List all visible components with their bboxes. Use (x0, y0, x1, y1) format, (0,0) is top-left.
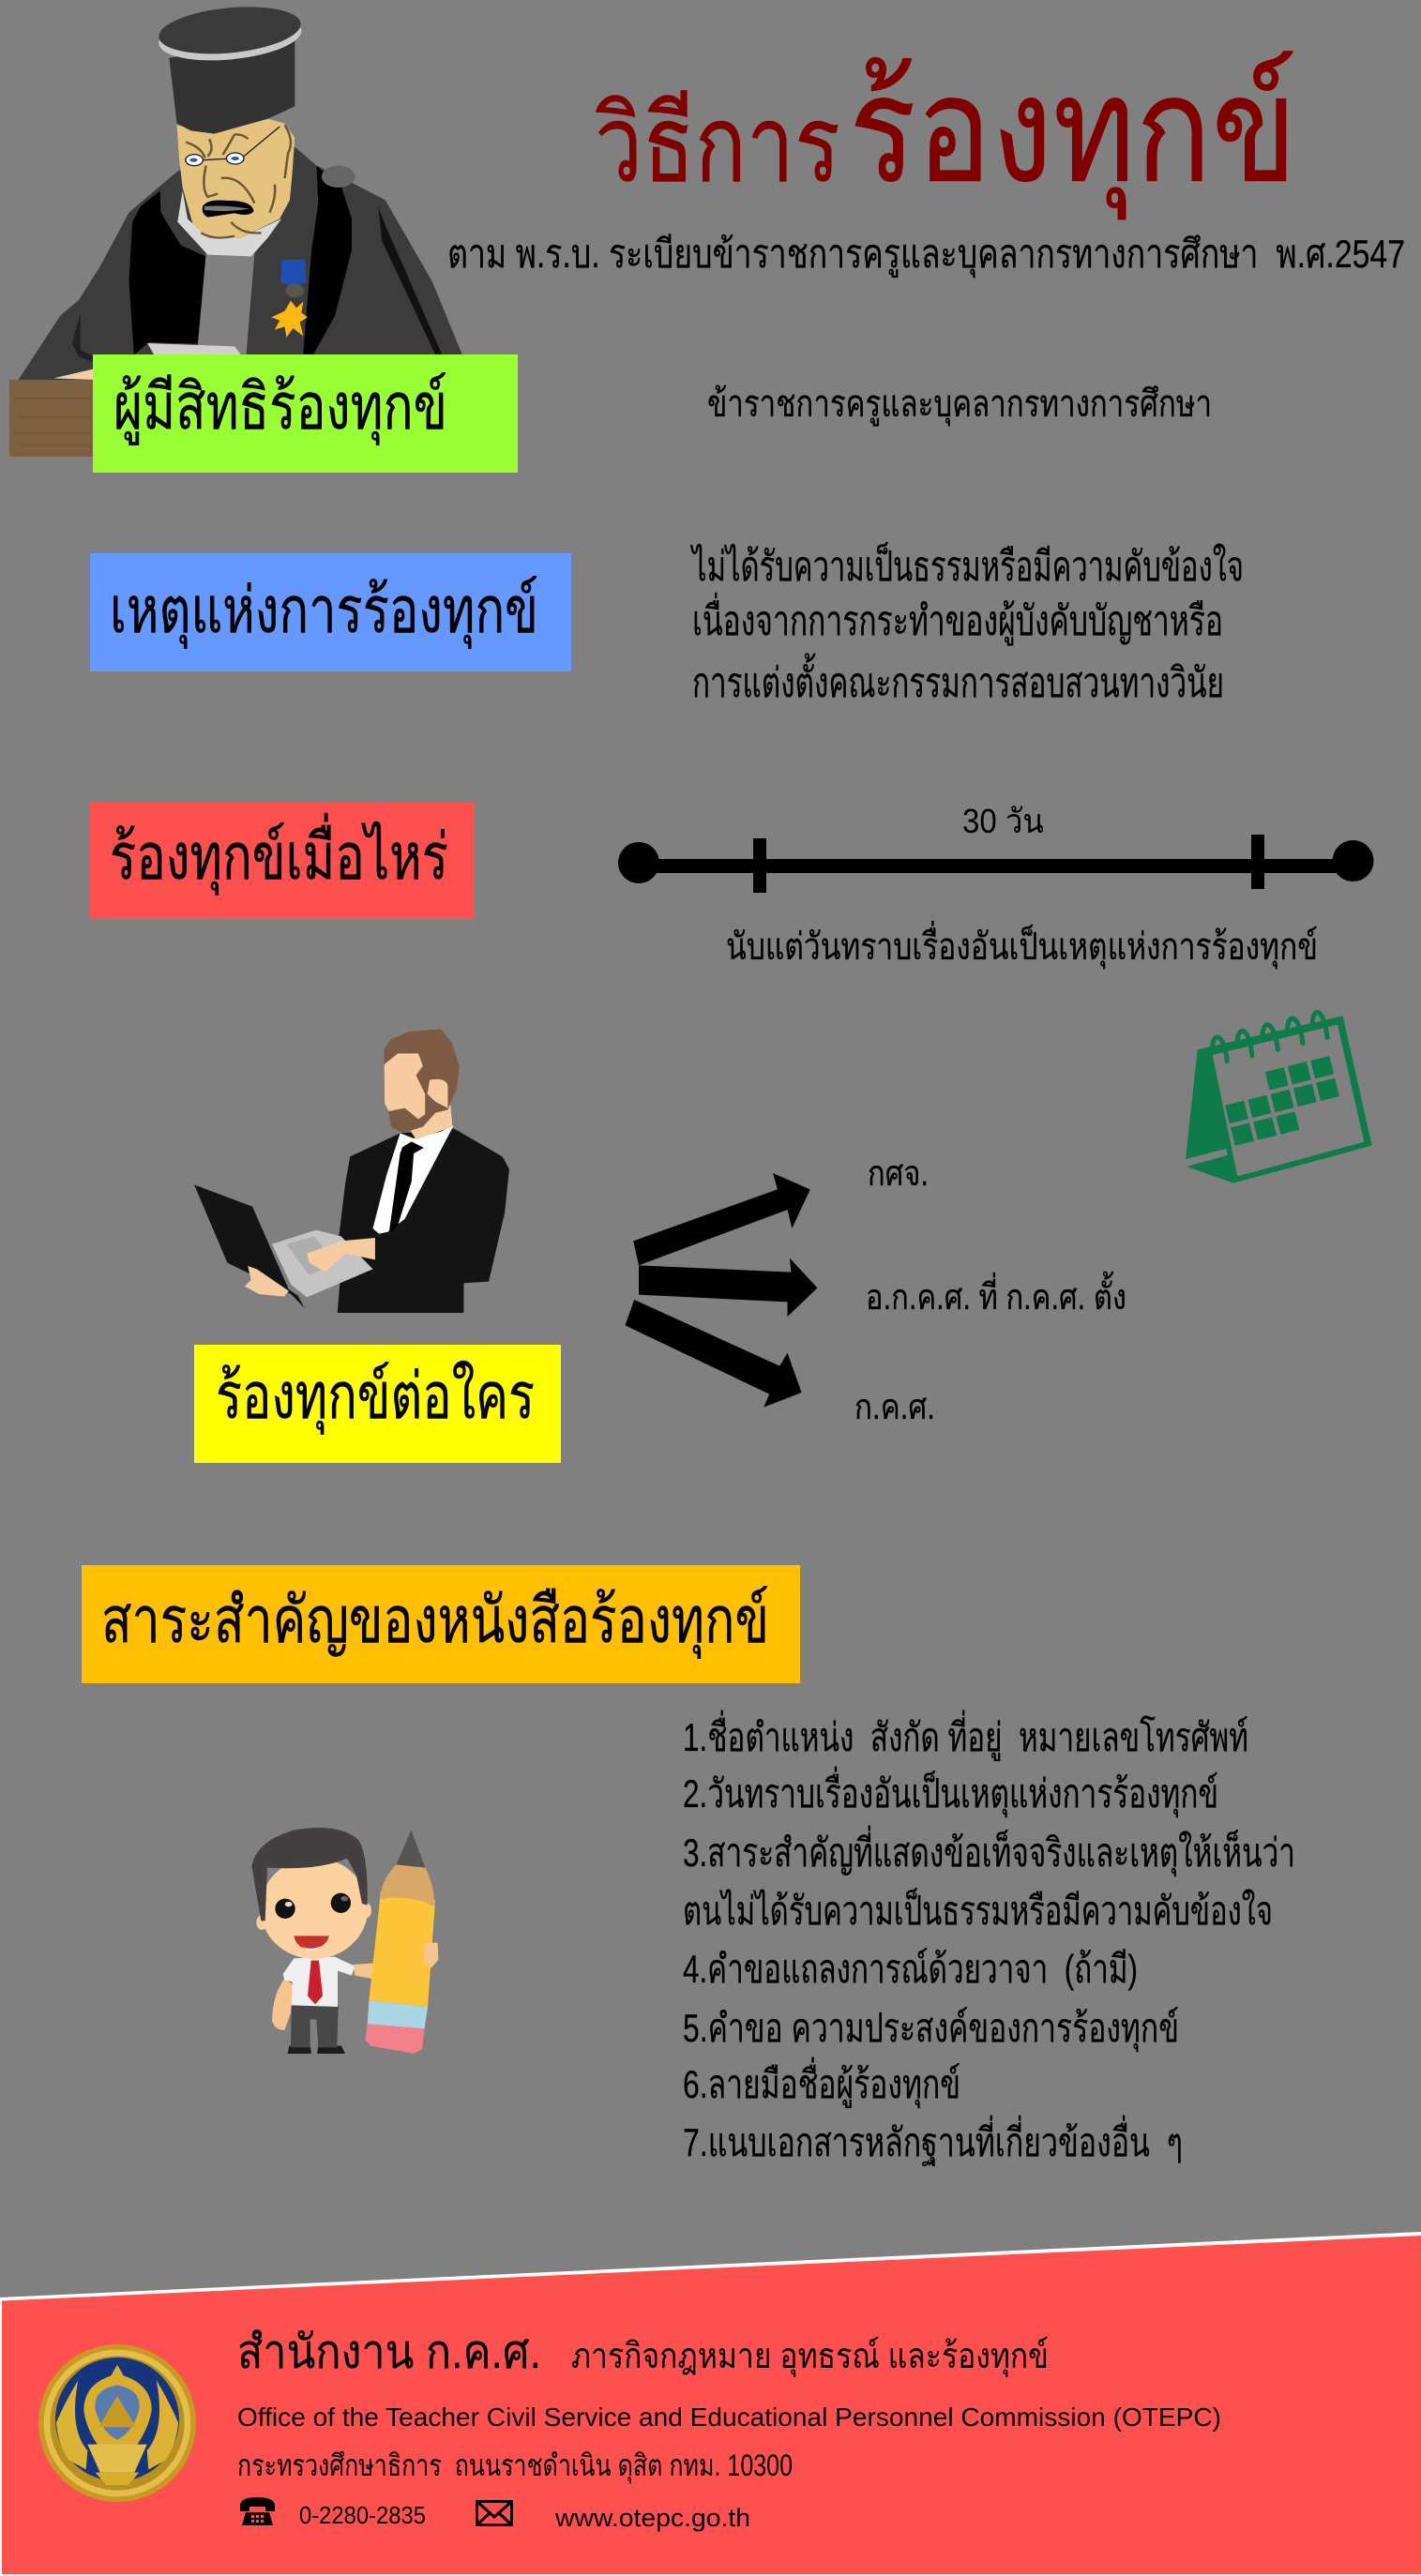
arrow: to third authority (626, 1300, 802, 1408)
list: letter contents: 5.คำขอ ความประสงค์ของการร้องทุกข์ (683, 2006, 1179, 2053)
title: ร้องทุกข์ (849, 48, 1297, 220)
icon: desk calendar (1186, 1012, 1372, 1183)
text: website: www.otepc.go.th (554, 2504, 750, 2532)
label: sub-committee: อ.ก.ค.ศ. ที่ ก.ค.ศ. ตั้ง (866, 1271, 1126, 1318)
heading: who may complain: ผู้มีสิทธิร้องทุกข์ (113, 371, 447, 445)
heading: when to complain: ร้องทุกข์เมื่อไหร่ (110, 813, 448, 896)
list: letter contents: 6.ลายมือชื่อผู้ร้องทุกข์ (683, 2057, 960, 2109)
title (595, 48, 1297, 220)
label: OTEPC: ก.ค.ศ. (854, 1388, 935, 1427)
label: OTEPC provincial: กศจ. (868, 1154, 929, 1194)
heading: grounds for complaint: เหตุแห่งการร้องทุกข์ (110, 575, 538, 649)
footer: office name and division: ภารกิจกฎหมาย อุทธรณ์ และร้องทุกข์ (571, 2336, 1049, 2377)
text: eligible persons: ข้าราชการครูและบุคลากรทางการศึกษา (707, 384, 1212, 427)
text: grounds description: การแต่งตั้งคณะกรรมการสอบสวนทางวินัย (692, 653, 1224, 706)
logo: OTEPC seal (38, 2344, 196, 2502)
title: วิธีการ (595, 85, 840, 204)
heading: who may complain (93, 354, 518, 473)
text: grounds description (690, 542, 1244, 706)
list: letter contents: 1.ชื่อตำแหน่ง สังกัด ที่อยู่ หมายเลขโทรศัพท์ (683, 1710, 1248, 1761)
list: letter contents (683, 1710, 1295, 2166)
list: letter contents: 7.แนบเอกสารหลักฐานที่เกี่ยวข้องอื่น ๆ (683, 2116, 1183, 2166)
arrows: three targets (626, 1173, 818, 1408)
list: letter contents: 2.วันทราบเรื่องอันเป็นเหตุแห่งการร้องทุกข์ (683, 1767, 1218, 1818)
illustration: angry judge at desk (9, 1, 462, 457)
desk (9, 380, 98, 457)
footer: english name: Office of the Teacher Civil Service and Educational Personnel Commission (OTEPC) (237, 2403, 1221, 2432)
timeline: 30 days: 30 วัน (962, 802, 1044, 840)
illustration: man with laptop (194, 1029, 509, 1313)
timeline: 30 days (618, 802, 1373, 893)
heading: essentials of the complaint letter: สาระสำคัญของหนังสือร้องทุกข์ (101, 1585, 769, 1659)
heading: to whom (194, 1345, 561, 1463)
icon: envelope (476, 2502, 512, 2524)
footer: office name and division: สำนักงาน ก.ค.ศ. (237, 2326, 541, 2378)
list: letter contents: 4.คำขอแถลงการณ์ด้วยวาจา (ถ้ามี) (683, 1947, 1138, 1991)
arrow: to first authority (633, 1173, 810, 1265)
illustration: cartoon man with pencil (251, 1828, 438, 2054)
icon: telephone (240, 2497, 275, 2525)
footer: office name and division (237, 2326, 1049, 2378)
heading: essentials of the complaint letter (82, 1565, 800, 1683)
heading: grounds for complaint (90, 553, 571, 671)
text: phone: 0-2280-2835 (299, 2501, 426, 2529)
text: grounds description: เนื่องจากการกระทำของผู้บังคับบัญชาหรือ (692, 592, 1223, 646)
footer: address: กระทรวงศึกษาธิการ ถนนราชดำเนิน ดุสิต กทม. 10300 (237, 2448, 793, 2484)
footer panel (0, 2232, 1421, 2576)
heading: to whom: ร้องทุกข์ต่อใคร (216, 1360, 535, 1435)
arrow: to second authority (639, 1258, 818, 1317)
heading: when to complain (90, 802, 475, 919)
